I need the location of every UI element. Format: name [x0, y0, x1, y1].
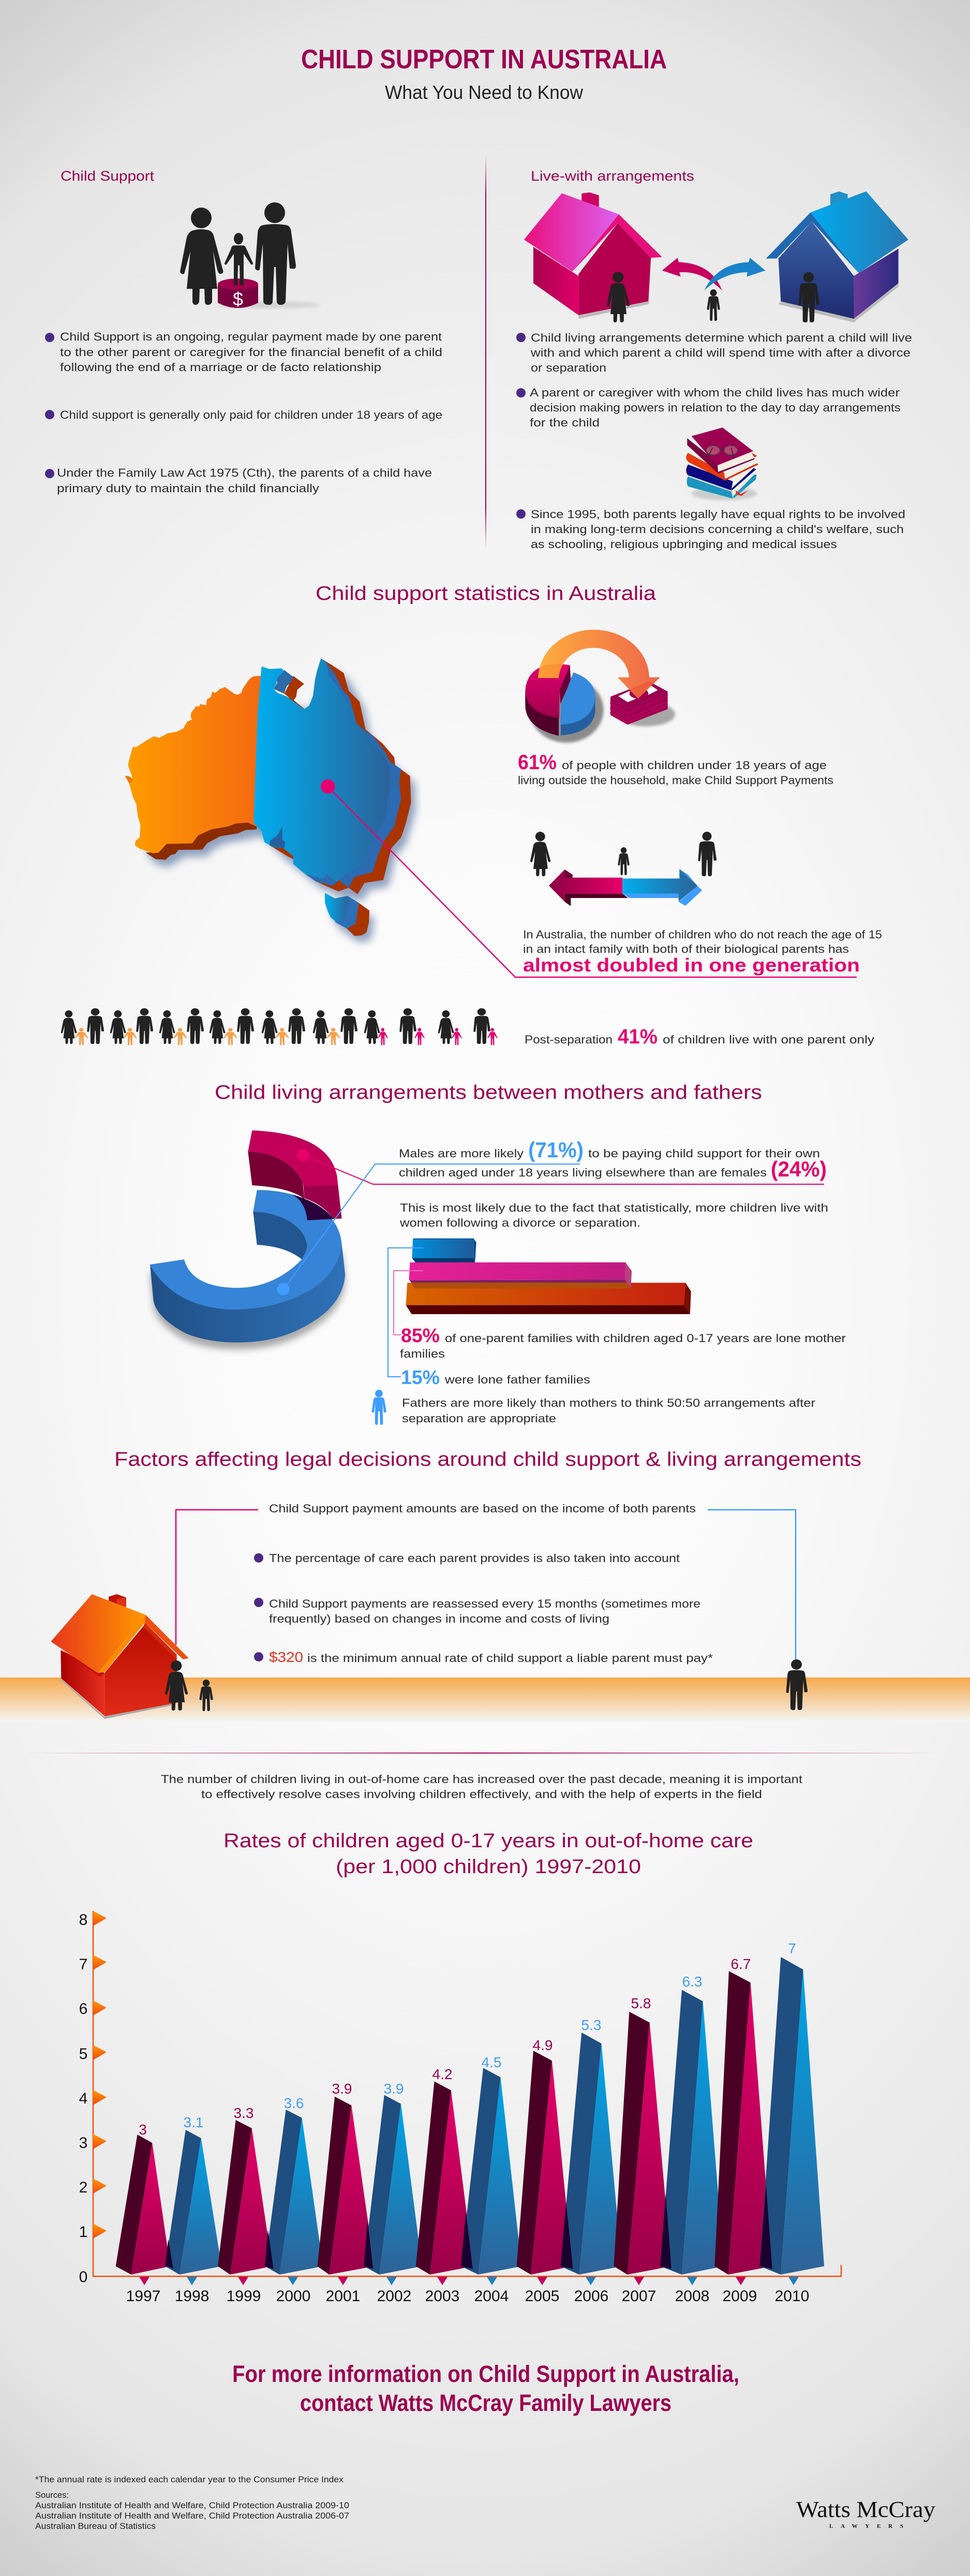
panel: live-with arrangements: [516, 168, 912, 551]
value labels: 3.9: [384, 2081, 404, 2097]
year labels: 2000: [276, 2288, 310, 2305]
map: eastern edge bevel: [305, 658, 401, 888]
call to action: For more information on Child Support in Australia,: [232, 2361, 739, 2387]
y axis labels: 7: [79, 1956, 87, 1973]
bar 1998: [165, 2130, 221, 2275]
footnote and sources: Australian Bureau of Statistics: [35, 2521, 156, 2531]
bullet: minimum rate: $320: [269, 1649, 303, 1665]
heading: chart title: (per 1,000 children) 1997-2010: [336, 1856, 641, 1878]
text: income of both parents: Child Support payment amounts are based on the income of both parents: [269, 1502, 696, 1515]
call to action: contact Watts McCray Family Lawyers: [300, 2390, 671, 2416]
bullet: reassessment: [254, 1597, 700, 1625]
bar 2003: [416, 2082, 473, 2275]
figures: mother child father: [530, 832, 717, 876]
icon: family with money: [180, 202, 321, 310]
logo: Watts McCray Lawyers: Watts McCray: [796, 2497, 935, 2522]
icon: double arrow: [549, 869, 702, 906]
connector line: blue: [708, 1510, 796, 1660]
bullet: minimum rate: is the minimum annual rate of child support a liable parent must pay*: [307, 1652, 713, 1665]
bullet: living arrangements: with and which parent a child will spend time with after a divorce: [530, 346, 911, 359]
chart axes: [93, 1911, 841, 2276]
bullet: reassessment: frequently) based on changes in income and costs of living: [269, 1612, 609, 1625]
x axis markers: [139, 2277, 799, 2285]
bullet: equal rights: [516, 508, 905, 551]
footnote and sources: Sources:: [35, 2490, 69, 2500]
arrows: child between homes: [662, 258, 765, 290]
chart: out-of-home care rates: [79, 1911, 841, 2305]
year labels: 2006: [574, 2288, 608, 2305]
bullet: definition: following the end of a marriage or de facto relationship: [60, 361, 381, 374]
bracket line: blue: [388, 1248, 423, 1377]
bar: orange total: [406, 1283, 691, 1314]
bullet: equal rights: Since 1995, both parents legally have equal rights to be involved: [531, 508, 905, 521]
marker: blue dot: [277, 1283, 290, 1296]
text: out-of-home care intro: to effectively resolve cases involving children effectively, and with the help of experts in the field: [201, 1788, 762, 1801]
icon: blue child: [371, 1390, 386, 1425]
bullet: equal rights: as schooling, religious upbringing and medical issues: [531, 538, 837, 551]
stat: males versus females: to be paying child support for their own: [588, 1147, 820, 1160]
stat: males versus females: [399, 1138, 827, 1181]
stat: males versus females: (24%): [771, 1157, 827, 1181]
footnote and sources: [35, 2475, 349, 2531]
bullet: age limit: Child support is generally only paid for children under 18 years of age: [60, 408, 442, 421]
text: explanation: This is most likely due to the fact that statistically, more children live with: [400, 1201, 828, 1214]
value labels: 4.9: [533, 2037, 553, 2053]
bar: blue fathers: [412, 1239, 476, 1262]
figures: row of families: [61, 1008, 498, 1045]
icon: mother and father figures with child: [607, 272, 819, 322]
year labels: 2005: [525, 2288, 559, 2305]
bullet: living arrangements: [516, 331, 912, 374]
bullet: decision powers: [516, 386, 901, 429]
bullet: reassessment: Child Support payments are reassessed every 15 months (sometimes more: [269, 1597, 700, 1610]
heading: live-with arrangements: Live-with arrangements: [531, 168, 694, 184]
bullet: family law act: [45, 466, 432, 495]
stat: males versus females: Males are more likely: [399, 1147, 524, 1160]
map: Queensland to Victoria blue: [253, 658, 390, 882]
text: out-of-home care intro: The number of children living in out-of-home care has increased over the past decade, meaning it is important: [161, 1773, 802, 1786]
year labels: 2003: [425, 2288, 459, 2305]
figures: mother and child: [165, 1660, 213, 1711]
value labels: 7: [788, 1940, 796, 1956]
bullet: definition: [45, 330, 442, 374]
map: eastern edge brown: [270, 658, 411, 894]
value labels: 3.9: [332, 2081, 352, 2097]
bullet: definition: to the other parent or caregiver for the financial benefit of a child: [60, 346, 442, 359]
bar 2004: [461, 2068, 521, 2275]
call to action: [232, 2361, 739, 2416]
value labels: 6.7: [731, 1956, 751, 1972]
bar 2007: [614, 2012, 671, 2275]
text: explanation: women following a divorce or separation.: [399, 1216, 640, 1229]
bar 1997: [116, 2135, 170, 2275]
footnote and sources: Australian Institute of Health and Welfare, Child Protection Australia 2009-10: [35, 2500, 349, 2510]
bullet: equal rights: in making long-term decisions concerning a child's welfare, such: [531, 523, 904, 536]
bar 1999: [218, 2120, 272, 2275]
panel: child support: [45, 168, 442, 495]
stat: 15 percent: [401, 1367, 590, 1389]
stat: intact family: [523, 928, 882, 976]
y axis labels: 8: [79, 1911, 87, 1929]
year labels: 1999: [227, 2288, 261, 2305]
bar 2002: [364, 2095, 422, 2275]
stat: post-separation 41 percent: [525, 1025, 874, 1048]
y axis labels: 5: [79, 2045, 87, 2063]
bracket line: pink: [394, 1271, 423, 1335]
bullet: family law act: primary duty to maintain the child financially: [57, 482, 319, 495]
bullet: living arrangements: Child living arrangements determine which parent a child will live: [531, 331, 912, 344]
map: Western Australia: [128, 676, 261, 853]
bullet: decision powers: decision making powers in relation to the day to day arrangements: [530, 401, 901, 414]
y axis labels: 1: [79, 2224, 87, 2241]
map of Australia: [125, 658, 416, 943]
heading: statistics: Child support statistics in Australia: [316, 583, 656, 605]
map: Tasmania: [325, 893, 369, 936]
stat: intact family: in an intact family with both of their biological parents has: [523, 943, 849, 955]
bar 2001: [318, 2097, 375, 2275]
stat: 85 percent: families: [400, 1347, 445, 1360]
connector line: pink: [176, 1510, 258, 1645]
callout line: blue: [283, 1164, 580, 1289]
value labels: 4.2: [432, 2066, 452, 2082]
y axis labels: 3: [79, 2135, 87, 2152]
heading: living arrangements: Child living arrangements between mothers and fathers: [215, 1082, 762, 1103]
callout line from map: [328, 787, 857, 977]
subtitle: What You Need to Know: [385, 82, 583, 103]
bullet: definition: Child Support is an ongoing, regular payment made by one parent: [60, 330, 442, 343]
year labels: [126, 2288, 809, 2305]
year labels: 1997: [126, 2288, 160, 2305]
year labels: 2002: [377, 2288, 411, 2305]
value labels: 3.1: [184, 2114, 203, 2130]
y axis labels: 2: [79, 2179, 87, 2196]
stat: males versus females: children aged under 18 years living elsewhere than are females: [399, 1166, 767, 1179]
text: out-of-home care intro: [161, 1773, 802, 1801]
year labels: 2001: [326, 2288, 360, 2305]
icon: red house: [51, 1594, 189, 1719]
bullet: living arrangements: or separation: [531, 361, 606, 374]
value labels: 3.6: [284, 2095, 304, 2111]
bar 2006: [561, 2033, 622, 2275]
ground band: [0, 1677, 970, 1722]
stat: intact family: In Australia, the number of children who do not reach the age of 15: [523, 928, 882, 941]
stat: 61 percent: [518, 751, 833, 787]
value labels: [139, 1940, 796, 2138]
bullet: family law act: Under the Family Law Act 1975 (Cth), the parents of a child have: [57, 466, 432, 479]
text: 50:50 arrangements: [402, 1396, 815, 1425]
stat: 61 percent: of people with children under 18 years of age: [562, 759, 827, 772]
text: 50:50 arrangements: Fathers are more likely than mothers to think 50:50 arrangements after: [402, 1396, 815, 1409]
stat: males versus females: (71%): [528, 1138, 584, 1162]
stat: post-separation 41 percent: Post-separation: [525, 1033, 613, 1046]
title: CHILD SUPPORT IN AUSTRALIA: [301, 45, 667, 75]
heading: factors: Factors affecting legal decisions around child support & living arrangements: [114, 1449, 861, 1470]
bullet: decision powers: A parent or caregiver with whom the child lives has much wider: [530, 386, 900, 399]
year labels: 2010: [775, 2288, 809, 2305]
footnote and sources: *The annual rate is indexed each calendar year to the Consumer Price Index: [35, 2475, 344, 2484]
marker: pink dot: [297, 1149, 309, 1161]
value labels: 4.5: [482, 2054, 501, 2070]
year labels: 2004: [474, 2288, 509, 2305]
map: Arnhem Land edge: [274, 670, 304, 709]
y axis labels: 0: [79, 2269, 87, 2286]
stat: 85 percent: of one-parent families with children aged 0-17 years are lone mother: [445, 1332, 846, 1345]
bullet: minimum rate: [254, 1649, 713, 1665]
icon: family with money: $: [233, 288, 243, 310]
icon: stack of books with glasses: [686, 428, 758, 501]
year labels: 2009: [723, 2288, 757, 2305]
stat: post-separation 41 percent: 41%: [618, 1025, 658, 1048]
value labels: 5.8: [631, 1995, 651, 2011]
stat: 15 percent: were lone father families: [444, 1373, 590, 1386]
figure: father: [786, 1659, 808, 1710]
stat: 85 percent: 85%: [401, 1325, 440, 1347]
footnote and sources: Australian Institute of Health and Welfare, Child Protection Australia 2006-07: [35, 2511, 349, 2521]
stat: 85 percent: [400, 1325, 846, 1360]
bar 2008: [660, 1990, 724, 2275]
value labels: 5.3: [581, 2017, 601, 2033]
heading: chart title: [223, 1830, 753, 1878]
icon: blue house: [766, 192, 908, 322]
map: Western Australia side: [145, 822, 257, 860]
stat: 15 percent: 15%: [401, 1367, 440, 1389]
bar 2000: [265, 2110, 323, 2275]
bar 2005: [517, 2051, 572, 2275]
text: 50:50 arrangements: separation are appropriate: [402, 1412, 556, 1425]
year labels: 2008: [675, 2288, 709, 2305]
bar 2010: [760, 1957, 824, 2275]
stat: 61 percent: 61%: [518, 751, 557, 774]
bar 2009: [714, 1971, 772, 2275]
chart: pie with arrow to money: [525, 630, 675, 743]
year labels: 1998: [175, 2288, 209, 2305]
bullet: percentage of care: The percentage of care each parent provides is also taken into account: [269, 1552, 680, 1565]
y axis labels: [79, 1911, 87, 2286]
y axis labels: 6: [79, 2000, 87, 2018]
value labels: 3.3: [234, 2105, 253, 2121]
chart: 3D number ring 71 vs 24: [150, 1130, 345, 1349]
callout line: pink: [303, 1155, 824, 1184]
heading: child support: Child Support: [61, 168, 155, 184]
chart: 3D bars lone parent families: [406, 1239, 691, 1314]
y axis labels: 4: [79, 2090, 87, 2107]
map: marker dot: [321, 779, 335, 793]
stat: intact family: almost doubled in one generation: [523, 954, 860, 976]
stat: post-separation 41 percent: of children live with one parent only: [663, 1033, 874, 1046]
bars: [116, 1957, 824, 2275]
stat: 61 percent: living outside the household, make Child Support Payments: [518, 774, 833, 787]
y axis markers: [93, 1911, 107, 2239]
year labels: 2007: [622, 2288, 656, 2305]
heading: chart title: Rates of children aged 0-17 years in out-of-home care: [223, 1830, 753, 1852]
logo: Watts McCray Lawyers: LAWYERS: [829, 2523, 903, 2529]
text: explanation: [399, 1201, 828, 1229]
icon: pink house: [524, 193, 662, 319]
bullet: decision powers: for the child: [530, 416, 600, 429]
value labels: 6.3: [682, 1974, 702, 1990]
bar: pink mothers: [409, 1262, 632, 1288]
value labels: 3: [139, 2122, 147, 2138]
